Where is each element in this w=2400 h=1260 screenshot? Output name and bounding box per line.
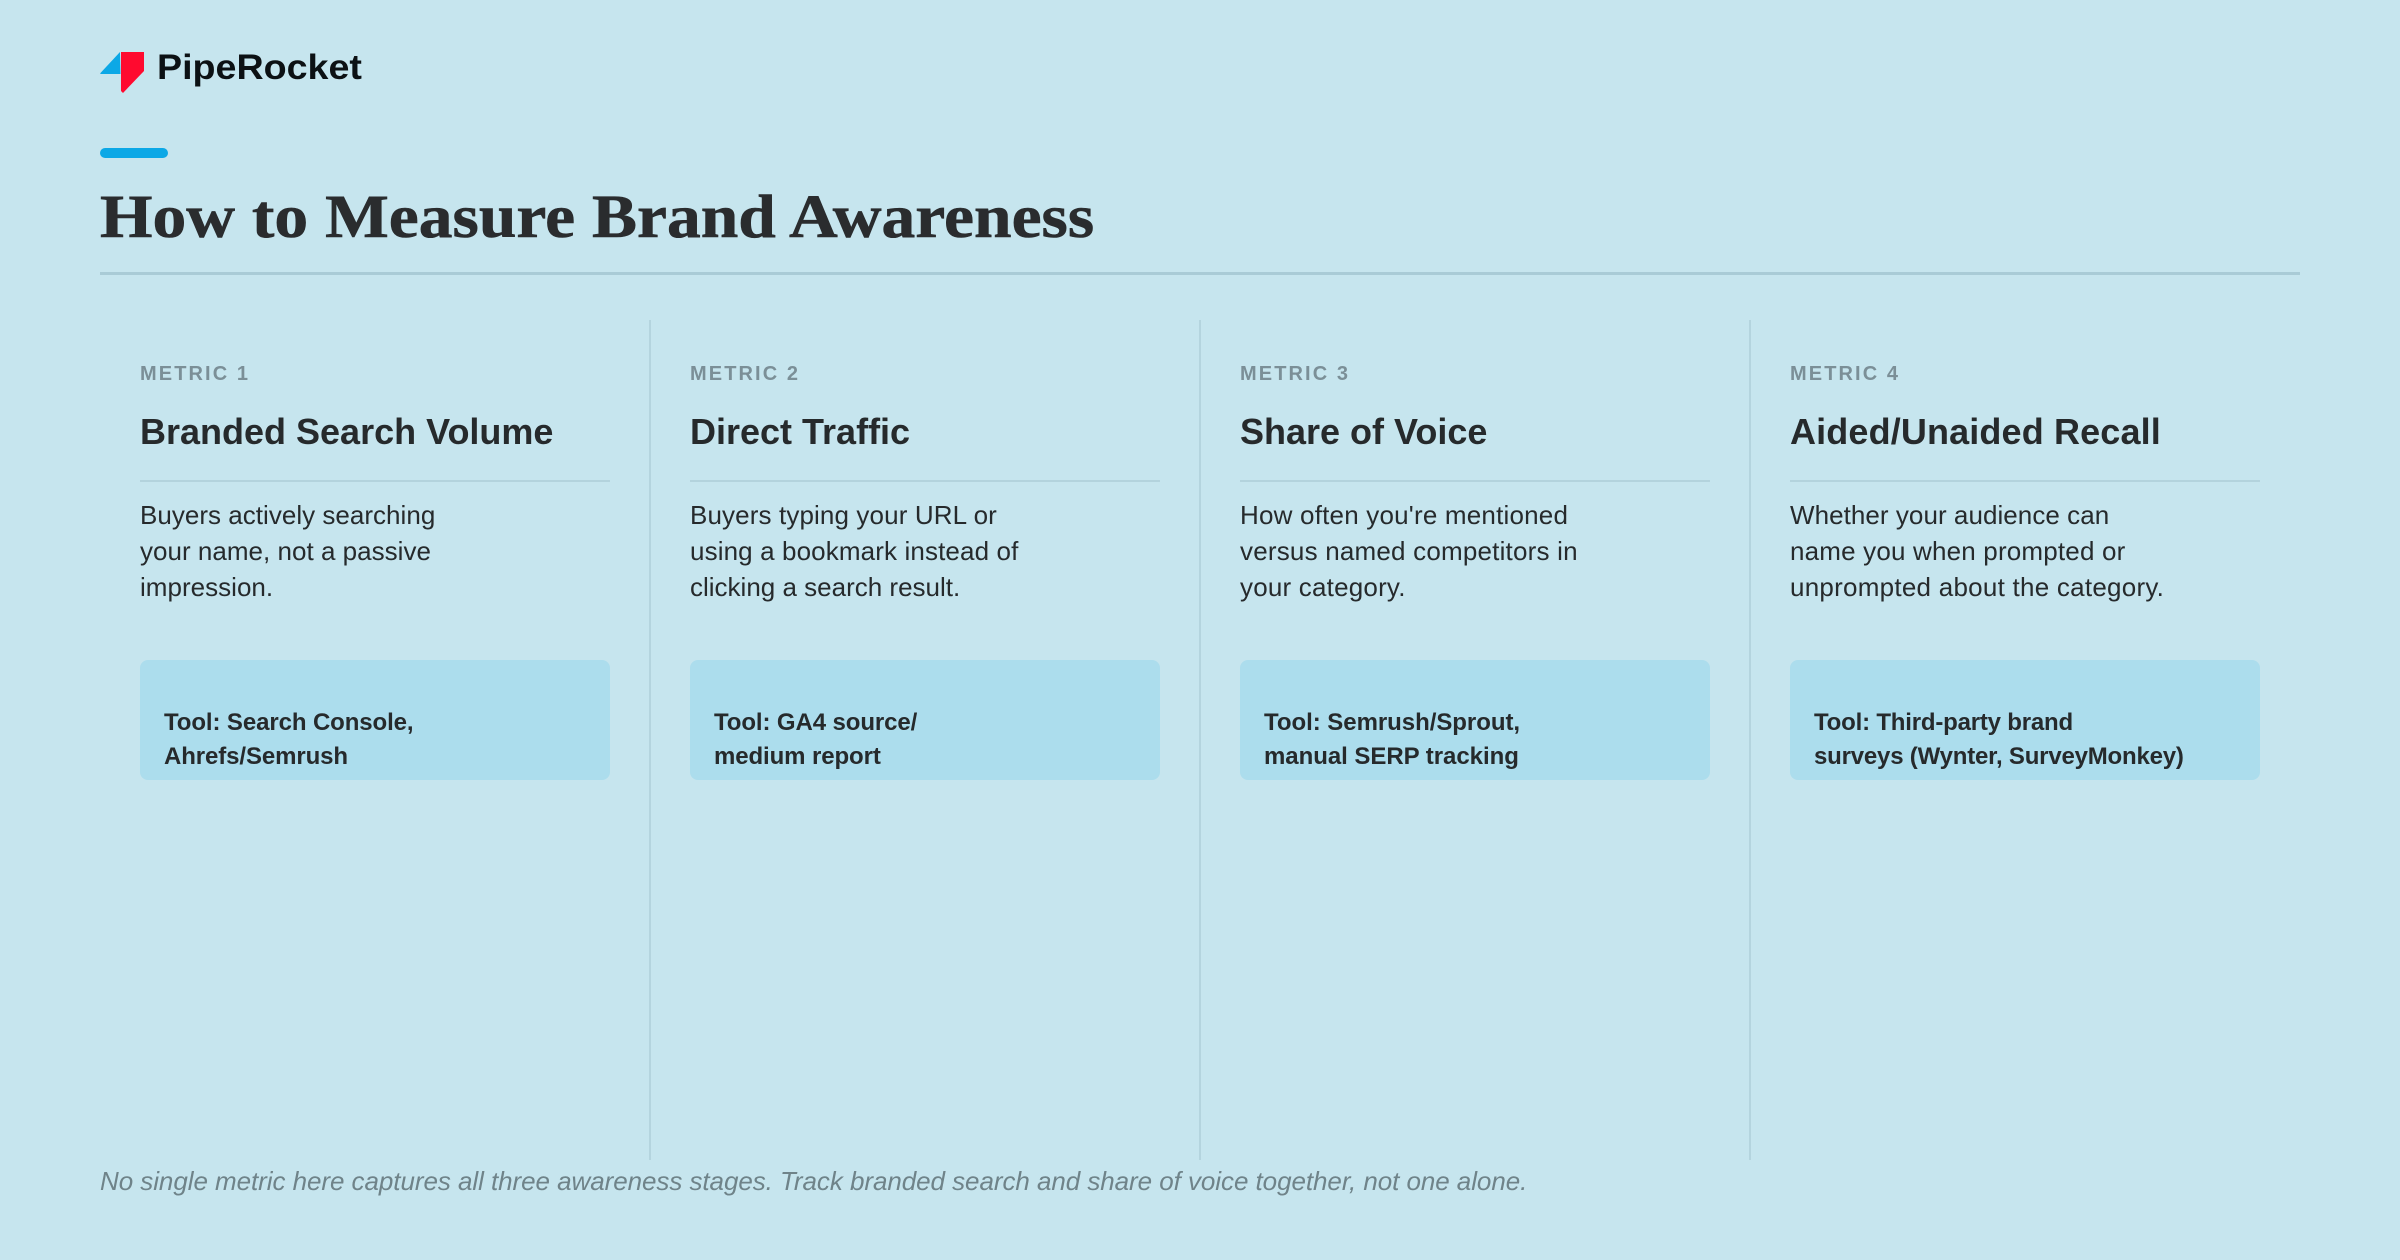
metric description: [1240, 500, 1578, 602]
heading rule: [690, 480, 1160, 482]
heading rule: [1240, 480, 1710, 482]
metric description: [140, 500, 435, 602]
tool callout: medium report: [714, 743, 881, 770]
metric heading: Direct Traffic: [690, 411, 910, 452]
logo: PipeRocket: [100, 48, 362, 93]
metric description: using a bookmark instead of: [690, 536, 1018, 566]
metric description: versus named competitors in: [1240, 536, 1578, 566]
metric description: your name, not a passive: [140, 536, 431, 566]
metric description: Buyers typing your URL or: [690, 500, 997, 530]
metric label: METRIC 3: [1240, 363, 1350, 385]
metric heading: Share of Voice: [1240, 411, 1487, 452]
tool callout: Ahrefs/Semrush: [164, 743, 348, 770]
title: How to Measure Brand Awareness: [100, 184, 1094, 251]
tool callout: [140, 660, 610, 780]
tool callout: Tool: GA4 source/: [714, 709, 917, 736]
heading rule: [140, 480, 610, 482]
metric description: your category.: [1240, 572, 1406, 602]
accent bar: [100, 148, 168, 158]
metric description: name you when prompted or: [1790, 536, 2125, 566]
metric description: impression.: [140, 572, 273, 602]
logo wordmark: PipeRocket: [157, 48, 362, 87]
tool callout: Tool: Third-party brand: [1814, 709, 2073, 736]
title rule: [100, 272, 2300, 275]
metric description: Buyers actively searching: [140, 500, 435, 530]
tool callout: Tool: Search Console,: [164, 709, 414, 736]
tool callout: Tool: Semrush/Sprout,: [1264, 709, 1520, 736]
metric description: [1790, 500, 2164, 602]
tool callout: [1790, 660, 2260, 780]
metric description: unprompted about the category.: [1790, 572, 2164, 602]
metric description: clicking a search result.: [690, 572, 960, 602]
metric label: METRIC 2: [690, 363, 800, 385]
panel: metric 2: [650, 320, 1201, 1160]
tool callout: [1240, 660, 1710, 780]
icon: rocket mark: [100, 52, 144, 93]
metric heading: Branded Search Volume: [140, 411, 553, 452]
heading rule: [1790, 480, 2260, 482]
tool callout: [690, 660, 1160, 780]
tool callout: manual SERP tracking: [1264, 743, 1519, 770]
panel: metric 1: [100, 320, 651, 1160]
metric heading: Aided/Unaided Recall: [1790, 411, 2161, 452]
tool callout: surveys (Wynter, SurveyMonkey): [1814, 743, 2184, 770]
panel: metric 4: [1790, 363, 2260, 780]
footnote: No single metric here captures all three awareness stages. Track branded search and share of voice together, not one alone.: [100, 1166, 1527, 1196]
metric label: METRIC 4: [1790, 363, 1900, 385]
panel: metric 3: [1200, 320, 1751, 1160]
metric description: How often you're mentioned: [1240, 500, 1568, 530]
metric label: METRIC 1: [140, 363, 250, 385]
metric description: Whether your audience can: [1790, 500, 2109, 530]
metric description: [690, 500, 1018, 602]
